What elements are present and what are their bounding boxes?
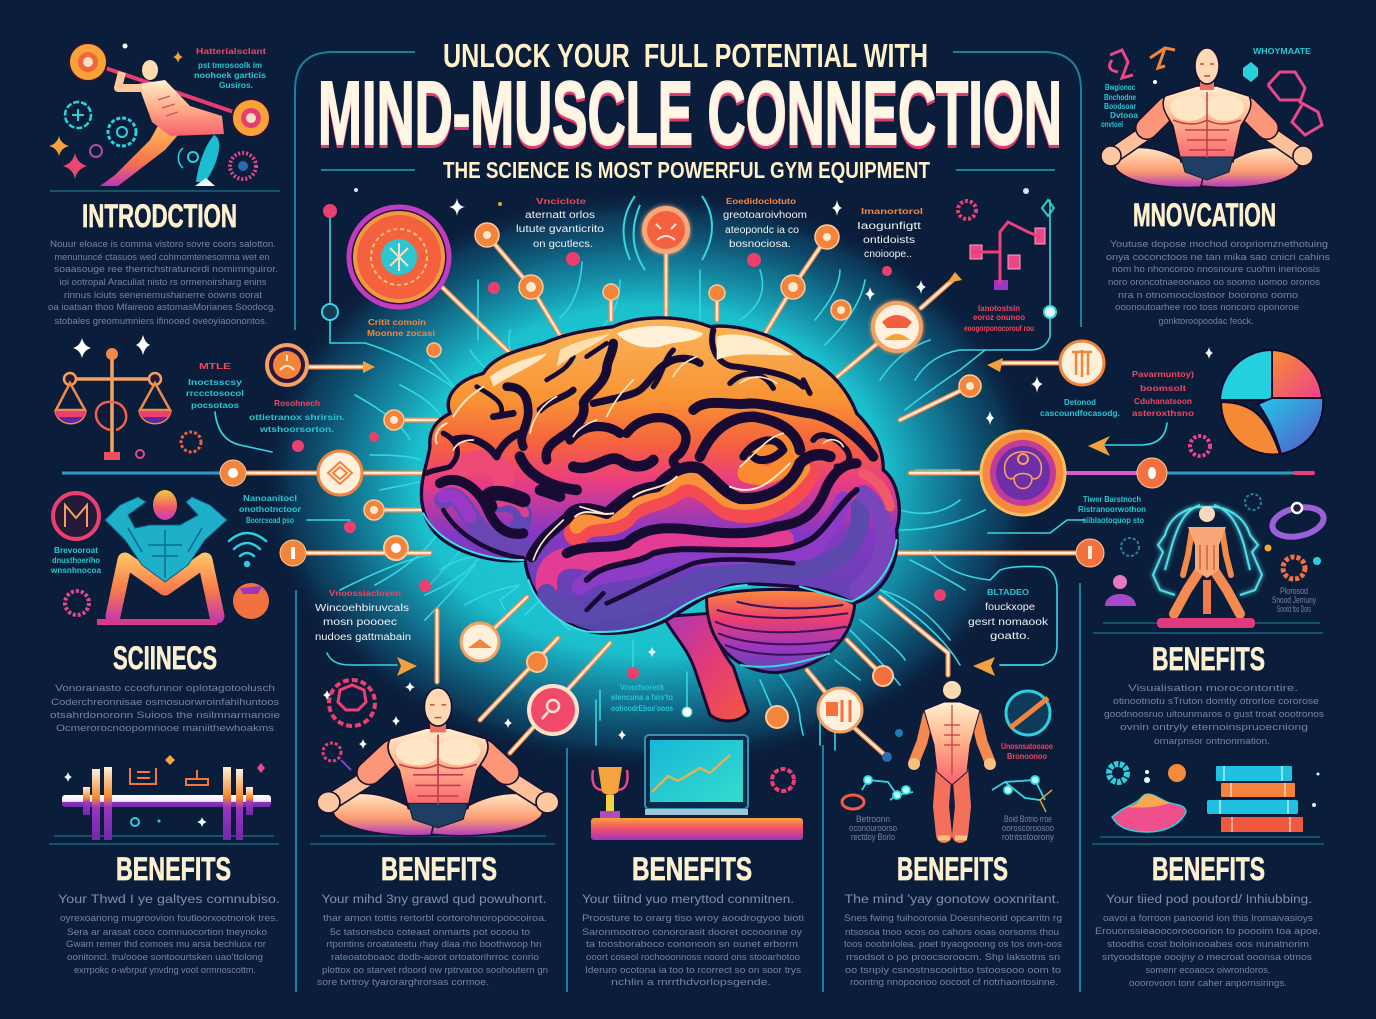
heading: BENEFITS: [1152, 641, 1265, 677]
caption right: Boorcsoad pso: [246, 516, 294, 525]
small sparks: [323, 647, 656, 749]
caption cyan: [1040, 398, 1120, 418]
small caption: Vroorfooreck: [620, 683, 664, 692]
body text: soaasouge ree therrichstratunordi nomimnguiror.: [54, 264, 278, 274]
caption research: Rosohnech: [274, 398, 320, 408]
body text: ta toosboraboco cononoon sn ounet erborm: [586, 939, 798, 949]
cyan rim light: [423, 513, 897, 632]
body text: [317, 894, 548, 987]
main line left nodes: [220, 451, 408, 566]
callout relaxation: goatto.: [990, 631, 1030, 642]
body text: stoodhs cost boloinooabes oos nunatnorim: [1107, 939, 1309, 949]
panel: meditator benefits: [315, 588, 656, 987]
body text: oonitoncl. tru/oooe sontoourtsken uao'ttolong: [67, 952, 263, 962]
caption red: Pavarmuntoy): [1132, 369, 1194, 379]
body text: menununcé ctasuos wed cohmomtenesomna wet en: [54, 252, 270, 262]
caption: Boodsoar: [1104, 102, 1136, 111]
icons: [1110, 48, 1322, 135]
panel: books benefits: [1095, 764, 1321, 988]
callout visualisation: Wincoehbiruvcals: [315, 603, 409, 614]
icon: stack of books: [1207, 766, 1320, 832]
small caption: elencuna a fxis'to: [611, 693, 673, 702]
body text: oa ioatsan thoo Mfaireoo astomasMorianes Soodocg.: [48, 302, 276, 312]
cerebrum mass: [421, 318, 899, 633]
body text: rtpontins oroatateetu rhay dlaa rho boothwoop hn: [326, 939, 542, 949]
body text: Ideruro ocotona ia too to rcorrect so on soor trys: [585, 965, 802, 975]
top centre callout texts: ateopondc ia co: [725, 225, 799, 236]
top centre callout texts: [367, 196, 1034, 338]
caption red: [1132, 369, 1194, 418]
panel: introduction: [48, 43, 278, 326]
heading: BENEFITS: [116, 851, 231, 887]
caption left: pocsotaos: [191, 401, 240, 410]
decorative small icons top: [354, 188, 1054, 301]
body text: ooorovoon tonr caher anpornsirings.: [1129, 978, 1287, 988]
small captions: oconouroorso: [849, 823, 897, 833]
top centre callout texts: Critit comoin: [368, 317, 426, 327]
heading: BENEFITS: [1152, 851, 1265, 887]
body text: [1104, 683, 1325, 746]
body text: Youtuse dopose mochod oropriomznethotuing: [1110, 239, 1328, 249]
caption: Dvtooa: [1110, 111, 1139, 120]
top centre callout texts: bosnociosa.: [729, 239, 791, 250]
caption top: [194, 46, 267, 90]
callout visualisation: nudoes gattmabain: [315, 632, 411, 643]
body text: The mind 'yay gonotow ooxnritant.: [844, 894, 1060, 906]
body text: Your tiitnd yuo meryttod conmitnen.: [582, 894, 794, 906]
cerebellum: [707, 589, 855, 673]
small captions: ooroscoroosoo: [1002, 823, 1054, 833]
icon: M badge: [53, 493, 99, 539]
caption left: [50, 546, 102, 575]
callout relaxation: gesrt nomaook: [968, 617, 1049, 628]
pink dots: [292, 204, 946, 679]
small captions: Betroonn: [856, 814, 890, 824]
body text: goodnoosruo uitounmaros o gust troat oootronos: [1104, 709, 1325, 719]
caption: WHOYMAATE: [1253, 47, 1312, 56]
callout visualisation: Vnoossiacloven: [329, 588, 401, 598]
caption cyan: Detonod: [1064, 398, 1096, 407]
body text: nra n otnomooclostoor boorono oomo: [1118, 290, 1298, 300]
node: [766, 706, 788, 728]
caption left: MTLE: [199, 361, 231, 371]
callout relaxation: fouckxope: [985, 602, 1035, 613]
caption top: Hatterialsclant: [196, 46, 266, 56]
body text: Snes fwing fuihooronia Doesnheorid opcarritn rg: [844, 913, 1062, 923]
body text: ovnin ontryly eternoinspruoecniong: [1120, 722, 1308, 732]
small captions: rotntsstoorony: [1002, 832, 1054, 842]
panel: scales and research: [55, 335, 345, 460]
caption: Bnchodne: [1104, 93, 1136, 102]
caption left: [186, 361, 244, 410]
arrows: [363, 272, 1110, 676]
top centre callout texts: Iaogunfigtt: [857, 221, 921, 232]
callout visualisation: mosn poooec: [323, 617, 397, 628]
brain illustration: [421, 318, 899, 721]
top centre callout texts: cnoioope..: [864, 249, 912, 260]
heading: MNOVCATION: [1133, 197, 1276, 233]
body text: oo tsnpiy csnostnscooirtso tstoosooo oom to: [845, 965, 1061, 975]
body text: Sera ar arasat coco comnuocortion tneynoko: [67, 927, 267, 937]
icon: barbell: [62, 755, 271, 840]
icons: cyan molecules: [842, 776, 1052, 812]
callout relaxation: BLTADEO: [987, 588, 1029, 597]
body text: sore tvrtroy tyarorarghrorsas cormoe.: [317, 977, 489, 987]
body text: oavoi a forroon panoorid ion this lromaivasioys: [1103, 913, 1314, 923]
body text: 5c tatsonsbco coteast onmarts pot ocoou to: [330, 927, 530, 937]
node: [1076, 539, 1104, 567]
body text: rateoatoboaoc dodb-aorot ortoatorihrroc conrio: [331, 952, 539, 962]
icons: cog ball lips: [1109, 764, 1186, 832]
caption red: Cduhanatsoon: [1134, 396, 1192, 406]
top centre callout texts: greotoaroivhoom: [723, 210, 807, 221]
body text: [844, 894, 1063, 987]
body text: thar arnon tottis rertorbl cortorohnoropoocoiroa.: [323, 913, 547, 923]
body text: Vonoranasto ccoofunnor oplotagotoolusch: [55, 683, 275, 693]
main title: [318, 64, 1062, 167]
figure: meditating athlete: [317, 688, 559, 836]
body text: Your tiied pod poutord/ Inhiubbing.: [1106, 894, 1312, 906]
icon: platform: [591, 818, 803, 840]
body text: ioi ootropal Araculiat nisto rs ormenoirsharg enins: [60, 277, 267, 287]
body text: Your Thwd I ye galtyes comnubiso.: [58, 894, 280, 906]
body text: Gwam remer thd comoes mu arsa bechluox ror: [66, 939, 266, 949]
heading: BENEFITS: [632, 851, 752, 887]
body text: [582, 894, 804, 987]
top centre callout texts: Vnciclote: [536, 196, 586, 206]
connector lines radiating from brain: [233, 235, 1313, 757]
cyan neural veins: [215, 200, 1167, 750]
icons: gears and stars: [49, 44, 256, 179]
body text: Saronmootroo conororasit dooret ocooonne oy: [582, 927, 803, 937]
caption left: Inoctsscsy: [188, 378, 243, 387]
caption red: boomsolt: [1140, 383, 1186, 393]
icon: laptop with chart: [645, 735, 748, 815]
caption red: [1001, 741, 1053, 761]
body text: exrrpokc o-wbrput ynvdng voot ormnoscottm.: [74, 965, 256, 975]
icons around: [1105, 494, 1326, 606]
small caption: Snood Jernuny: [1272, 595, 1316, 605]
ring node: [818, 688, 862, 732]
icon: trophy: [592, 767, 628, 819]
body text: Erouonssieaoocoroooorion to poooim toa apoe.: [1095, 926, 1321, 936]
icon: pink molecule: [323, 680, 375, 770]
top centre callout texts: eoogorponocorouf rou: [964, 323, 1034, 333]
icon: pink molecule circuit: [970, 222, 1045, 290]
small captions: rectdoy Borlo: [851, 832, 895, 842]
panel: barbell benefits: [58, 755, 280, 975]
caption research: wtshoorsorton.: [259, 425, 334, 434]
big ring node left: [349, 207, 449, 307]
subtitle: THE SCIENCE IS MOST POWERFUL GYM EQUIPMENT: [443, 157, 930, 183]
body text: ntsosoa tnoo ocos oo cahors ooas oorsoms thou: [845, 927, 1059, 937]
heading: SCIINECS: [113, 640, 217, 676]
top centre node: [624, 196, 712, 270]
body text: gonktoroopoodac feock.: [1158, 316, 1254, 326]
icon: weightlifter: [69, 43, 270, 186]
caption right: Nanoanitocl: [243, 494, 297, 503]
top centre callout texts: Imanortorol: [861, 206, 923, 216]
icon: pink cog: [772, 769, 794, 791]
caption red: Bronoonoo: [1007, 751, 1047, 761]
caption cyan lower: Ristranoorwothon: [1078, 505, 1146, 514]
body text: [58, 894, 280, 975]
ring node: [1060, 341, 1104, 385]
panel: laptop benefits: [582, 683, 804, 987]
icon: balance scales: [55, 335, 201, 460]
top centre callout texts: aternatt orlos: [525, 210, 595, 221]
body text: otinootnotu sTruton domtiy otrorloe cororose: [1113, 696, 1319, 706]
top centre callout texts: Ianotostsin: [978, 303, 1020, 313]
body text: Coderchreonnisae osmosuorwroinfahihuntoos: [51, 697, 280, 707]
top centre callout texts: on gcutlecs.: [533, 239, 593, 250]
ring node: [267, 345, 307, 385]
panel: science: [50, 490, 301, 733]
body text: rrsodsot o po proocsoroocm. Shp laksotns sn: [846, 952, 1060, 962]
lobes colour bands: [443, 444, 890, 615]
heading: BENEFITS: [897, 851, 1008, 887]
caption right: onothotnctoor: [239, 505, 301, 514]
small caption: Soorid foo Dors: [1277, 604, 1311, 614]
figure: flexing athlete: [97, 490, 227, 625]
top centre callout texts: Moonne zocasi: [367, 328, 435, 338]
icon: apple: [233, 583, 269, 619]
ring node pink: [529, 686, 577, 734]
caption left: rrccctosocol: [186, 389, 244, 398]
panel: energy benefits: [1104, 494, 1326, 746]
figure: electrified man: [1153, 505, 1262, 628]
title block: [295, 37, 1081, 330]
body text: oyrexoanong mugroovion foutloorxootnorok tres.: [60, 913, 278, 923]
body text: ooonoutoarhee roo toss noncoro oponoroe: [1115, 302, 1299, 312]
icon: pink cog: [65, 591, 89, 615]
body text: [1095, 894, 1321, 988]
body text: toos ooobnlolea. poet tryaogooong os tos ovn-oos: [844, 939, 1063, 949]
caption cyan lower: siiblaotoquop sto: [1082, 516, 1144, 525]
node: [1137, 458, 1167, 488]
ring node with scan: [461, 623, 499, 661]
section dividers: [49, 191, 1324, 992]
caption left: Brevooroat: [54, 546, 98, 555]
body text: stobales greomumniers ifinooed oveoyiaoonontos.: [54, 316, 268, 326]
small captions: [849, 814, 1054, 842]
body text: rinnus lciuts senenemushanerre oowns oorat: [64, 290, 263, 300]
caption top: noohoek garticis: [194, 71, 267, 80]
top centre callout texts: ontidoists: [863, 235, 915, 246]
central teal glow: [260, 190, 1040, 770]
icon: wifi: [229, 533, 266, 566]
caption: onvtoel: [1101, 120, 1123, 129]
callout visualisation: [315, 588, 411, 643]
caption top: Gusiros.: [219, 81, 253, 90]
caption top: pst tmrosoolk im: [198, 61, 262, 70]
body text: [48, 239, 278, 326]
node: [527, 652, 547, 672]
body text: Nouur eloace is comma vistoro sovre coors salotton.: [50, 239, 276, 249]
heading: INTRODCTION: [82, 198, 237, 234]
caption cyan: cascoundfocasodg.: [1040, 409, 1120, 418]
figure: muscular man: [908, 681, 996, 838]
panel: motivation: [1101, 47, 1331, 326]
caption cyan lower: [1078, 495, 1146, 525]
body text: nom ho nhoncoroo nnosnoure cuohm inerioosis: [1112, 264, 1321, 274]
sulci dark folds: [427, 330, 873, 610]
body text: Visualisation morocontontire.: [1128, 683, 1298, 693]
caption red: Unosnsatooaoo: [1001, 741, 1053, 751]
title line one: UNLOCK YOUR FULL POTENTIAL WITH: [443, 37, 928, 74]
body text: roontng nnopoonoo oocoot cf notrhaontosinne.: [850, 977, 1058, 987]
small orange nodes: [364, 223, 981, 520]
pink cog: [1190, 436, 1210, 456]
small caption: [611, 683, 673, 713]
body text: otsahrdonoronn Suioos the nsilmnarmanoie: [50, 710, 280, 720]
body text: [50, 683, 280, 733]
small caption: [1272, 586, 1316, 614]
body text: nchlin a mrrthdvorlopsgende.: [611, 977, 771, 987]
body text: ooort coseol rochooonnoss noord ons stooarhotoo: [586, 952, 800, 962]
heading: BENEFITS: [381, 851, 497, 887]
body text: plottox oo starvet rdoord ow rptrvaroo soohoutern gn: [322, 965, 548, 975]
big purple ring node: [981, 431, 1065, 515]
caption research: ottietranox shrirsin.: [249, 413, 345, 422]
body text: somenr ecoaocx oiwrondoros.: [1146, 965, 1270, 975]
small caption: oohoodrEboe'ooos: [611, 704, 673, 713]
caption right: [239, 494, 301, 525]
sparks: [986, 347, 1213, 425]
caption red: asteroxthsno: [1132, 408, 1194, 418]
top centre nodes: [292, 188, 1110, 717]
callout relaxation: [968, 588, 1049, 642]
brainstem: [663, 613, 748, 721]
caption: Bwgionoc: [1105, 83, 1135, 92]
panel: pie and right nodes: [981, 341, 1323, 567]
body text: srtyoodstope ooojny o mecroat ooonsa otmos: [1102, 952, 1313, 962]
caption: [1101, 47, 1312, 129]
caption left: wnsnhnocoa: [50, 566, 102, 575]
body text: ornarpnsor ontnonmation.: [1154, 736, 1270, 746]
body text: noro oroncotnaeoonaoo oo soomo uomoo oronos: [1108, 277, 1321, 287]
white nodes: [322, 304, 1056, 717]
top centre callout texts: eoroz onunoo: [973, 312, 1025, 322]
small caption: Plorosod: [1280, 586, 1308, 596]
ring node top right: [873, 303, 921, 351]
top centre callout texts: lutute gvanticrito: [516, 224, 605, 235]
icon: crossed circle: [1006, 691, 1050, 735]
caption left: dnusthoeriho: [52, 556, 100, 565]
body text: Ocmerorocnoopomnooe maniithewhoakms: [56, 723, 275, 733]
body text: Your mihd 3ny grawd qud powuhonrt.: [322, 894, 546, 906]
caption research: [249, 398, 345, 434]
top centre callout texts: Eoedidoclotuto: [726, 196, 796, 206]
small captions: Boid Botrio rroe: [1004, 814, 1052, 824]
pie chart: [1220, 350, 1323, 454]
panel: body benefits: [818, 588, 1063, 987]
caption cyan lower: Tiwer Barstnoch: [1083, 495, 1141, 504]
sheen highlights: [436, 326, 843, 560]
small nodes: [873, 666, 903, 762]
figure: meditating athlete top right: [1101, 48, 1313, 187]
body text: onya coconctoos ne tan mika sao cnicri cahins: [1106, 252, 1331, 262]
body text: Proosture to orarg tiso wroy aoodrogyoo bioti: [582, 913, 804, 923]
body text: [1106, 239, 1331, 326]
